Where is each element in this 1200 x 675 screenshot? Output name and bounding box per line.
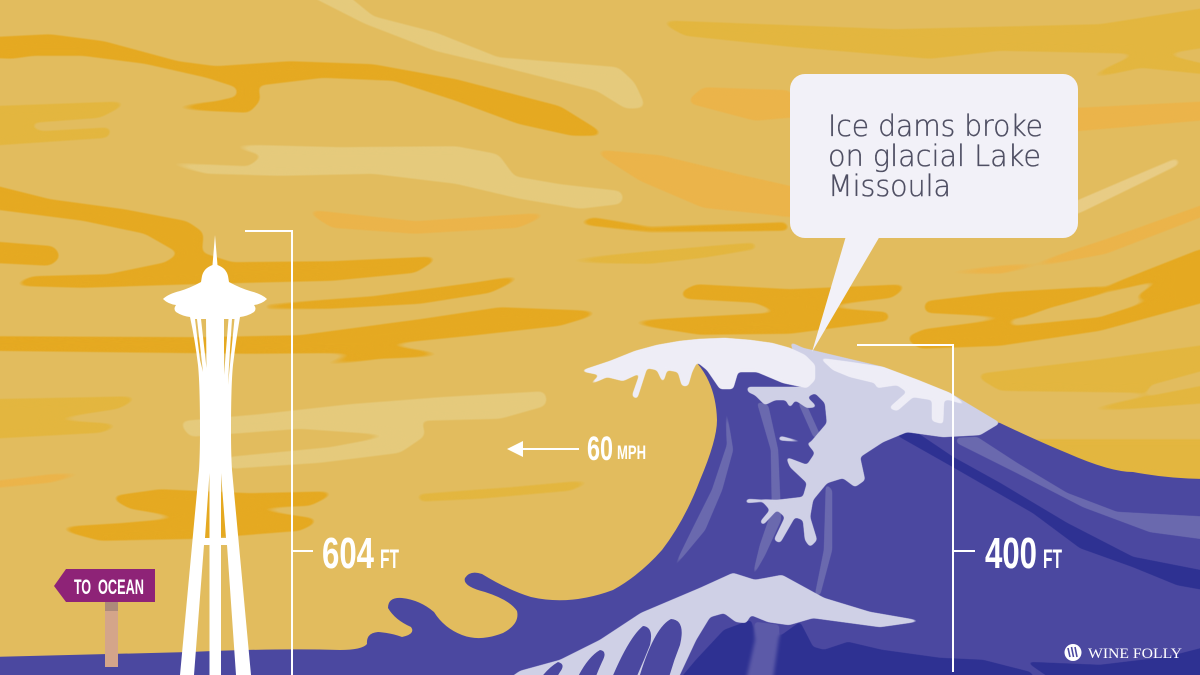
speed arrow: 60 mph: 60 [587,430,613,468]
sky clouds [0,0,1200,540]
dark wave band [895,430,1200,591]
height bracket: 604 ft: FT [380,544,399,574]
height bracket: 604 ft [245,231,399,675]
logo: Wine Folly [1064,644,1183,662]
speech bubble callout: on glacial Lake [828,139,1041,173]
wave body and ground water [0,345,1200,675]
speech bubble callout [790,74,1078,352]
speed arrow: 60 mph: MPH [617,443,646,464]
height bracket: 400 ft: FT [1043,544,1062,574]
sign: to ocean [54,569,155,667]
height bracket: 604 ft: 604 [322,529,374,578]
sign: to ocean: TO [74,576,91,599]
speed arrow: 60 mph [507,430,646,468]
speech bubble callout: Ice dams broke [828,109,1043,143]
sign: to ocean: OCEAN [98,576,144,599]
height bracket: 400 ft [857,345,1062,672]
speech bubble callout: Missoula [828,169,951,203]
lavender foam on crest [745,342,1000,547]
dark water base [675,620,1200,675]
icon: Space Needle tower [163,235,267,675]
lower wave foam [500,573,922,675]
height bracket: 400 ft: 400 [985,529,1037,578]
white wave crest [580,338,968,424]
logo: Wine Folly: WINE FOLLY [1088,646,1183,662]
wave streaks [645,400,1200,612]
